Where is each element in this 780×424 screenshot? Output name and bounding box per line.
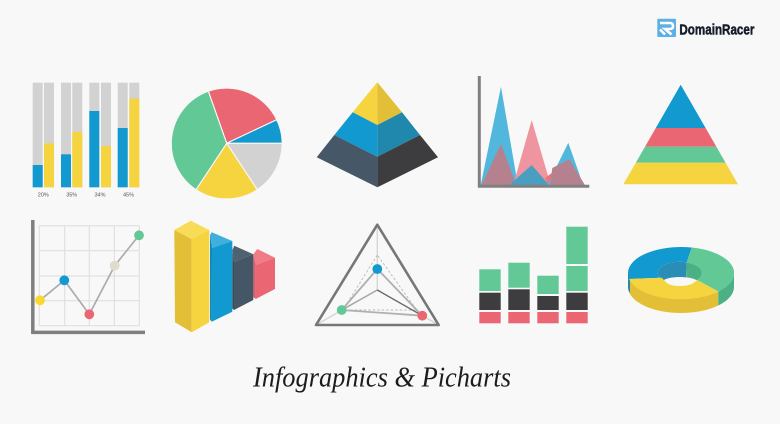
chart: stacked bar chart: [479, 227, 588, 323]
chart: 3D descending bars: [174, 221, 275, 332]
logo: DomainRacer: [657, 19, 755, 38]
3D bar: blue: [210, 232, 232, 322]
chart: 3D donut: [628, 247, 734, 313]
bar chart percentage labels: 20%: [38, 192, 49, 198]
chart: pie chart: [171, 88, 282, 199]
bar chart percentage labels: 45%: [123, 192, 134, 198]
data point markers: [35, 230, 144, 319]
donut top faces: [628, 247, 734, 292]
area chart axes: [479, 76, 589, 186]
chart: paired bar chart: [33, 83, 139, 198]
3D bar: slate: [232, 246, 253, 310]
bar chart percentage labels: [38, 192, 134, 198]
chart: radar triangle: [316, 225, 439, 325]
donut hole opening: [663, 277, 697, 286]
3D bar: pink: [253, 249, 275, 299]
chart: overlapping area chart: [479, 76, 589, 186]
chart: 3D layered pyramid: [317, 82, 438, 187]
chart: flat stacked triangle: [623, 85, 738, 184]
icon: logo square: [657, 19, 676, 37]
chart: line chart with grid: [33, 220, 145, 332]
data line: [40, 235, 139, 314]
logo wordmark: DomainRacer: [679, 22, 755, 38]
bar chart percentage labels: 35%: [66, 192, 77, 198]
3D bar: yellow: [174, 221, 209, 332]
donut yellow face: [629, 278, 718, 299]
donut side walls: [628, 273, 734, 313]
donut hole inner wall: [658, 262, 702, 282]
radar outer triangle: [316, 225, 439, 325]
line chart axes: [33, 220, 145, 332]
bar chart percentage labels: 34%: [94, 192, 106, 198]
title: Infographics & Picharts: [252, 362, 511, 394]
radar data points: [337, 264, 427, 321]
